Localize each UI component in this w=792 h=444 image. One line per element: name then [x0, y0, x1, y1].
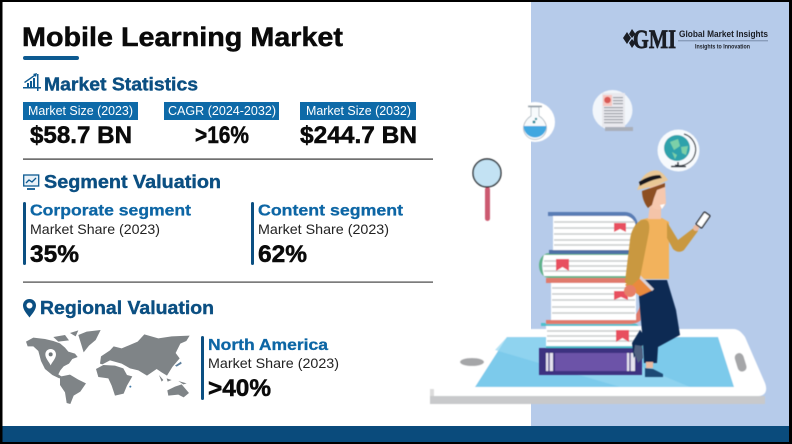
- panel: regional valuation: [23, 298, 339, 404]
- north america callout: >40%: [208, 375, 271, 402]
- phone base: [430, 329, 766, 404]
- content segment: Content segment: [258, 202, 404, 220]
- icon: certificate: [592, 90, 633, 131]
- corporate segment: 35%: [30, 241, 79, 268]
- hat: [637, 170, 668, 190]
- head: [649, 183, 666, 209]
- person: [624, 170, 710, 377]
- top blue book: [548, 212, 638, 250]
- white left panel: [2, 2, 532, 427]
- smile: [660, 204, 665, 209]
- logo: Global Market Insights: [623, 25, 768, 54]
- corporate segment: [23, 202, 192, 268]
- panel: market statistics: [23, 73, 417, 149]
- red book: [546, 278, 641, 324]
- content segment: 62%: [258, 241, 307, 268]
- stat: market size 2032: $244.7 BN: [300, 122, 417, 149]
- phone speaker: [460, 358, 484, 366]
- logo: Global Market Insights: Insights to Innovation: [695, 44, 750, 50]
- world map: [26, 330, 190, 404]
- heading: regional valuation: Regional Valuation: [40, 298, 214, 318]
- corporate segment: Corporate segment: [30, 202, 192, 220]
- panel: segment valuation: [23, 172, 404, 268]
- logo: Global Market Insights: GMI: [633, 25, 676, 54]
- teal book: [541, 323, 643, 348]
- heading: market statistics: Market Statistics: [44, 74, 198, 94]
- north america callout: [201, 336, 339, 402]
- stat: CAGR: >16%: [195, 122, 249, 149]
- front shoe: [645, 368, 663, 377]
- green book: [539, 250, 632, 278]
- heading: segment valuation: Segment Valuation: [44, 172, 221, 192]
- stat: market size 2032: Market Size (2032): [306, 104, 411, 118]
- phone button: [734, 352, 748, 373]
- logo: Global Market Insights: Global Market Insights: [679, 29, 768, 40]
- stat: market size 2032: [300, 102, 417, 149]
- stat: CAGR: CAGR (2024-2032): [168, 104, 276, 118]
- trousers: [639, 280, 680, 363]
- footer band: [2, 426, 789, 442]
- icon: bar chart growth: [23, 73, 41, 91]
- title: Mobile Learning Market: [22, 22, 343, 52]
- stat: market size 2023: [23, 102, 138, 149]
- front arm: [667, 222, 698, 252]
- hand: [624, 285, 636, 297]
- stack of books: [539, 212, 643, 375]
- icon: flask: [515, 102, 555, 142]
- hand holding phone: [693, 225, 699, 231]
- content segment: Market Share (2023): [258, 221, 389, 237]
- corporate segment: Market Share (2023): [30, 221, 160, 237]
- hair: [642, 183, 665, 208]
- neck: [648, 205, 661, 219]
- blue right panel: [531, 2, 789, 427]
- stat: market size 2023: Market Size (2023): [28, 104, 133, 118]
- smartphone: [696, 212, 710, 228]
- icon: location pin: [23, 299, 36, 318]
- north america callout: North America: [208, 337, 328, 354]
- icon: globe: [658, 130, 700, 172]
- north america callout: Market Share (2023): [208, 355, 339, 371]
- ankle: [646, 362, 653, 368]
- stat: market size 2023: $58.7 BN: [30, 122, 132, 149]
- back arm: [625, 220, 649, 287]
- purple book: [539, 348, 642, 375]
- carried book: [625, 275, 653, 296]
- stat: CAGR: [164, 102, 279, 149]
- phone screen: [475, 337, 734, 387]
- sweater: [638, 218, 669, 279]
- content segment: [251, 202, 404, 268]
- back leg and shoe: [632, 330, 648, 358]
- icon: monitor chart: [24, 175, 39, 189]
- icon: magnifying glass: [473, 159, 501, 221]
